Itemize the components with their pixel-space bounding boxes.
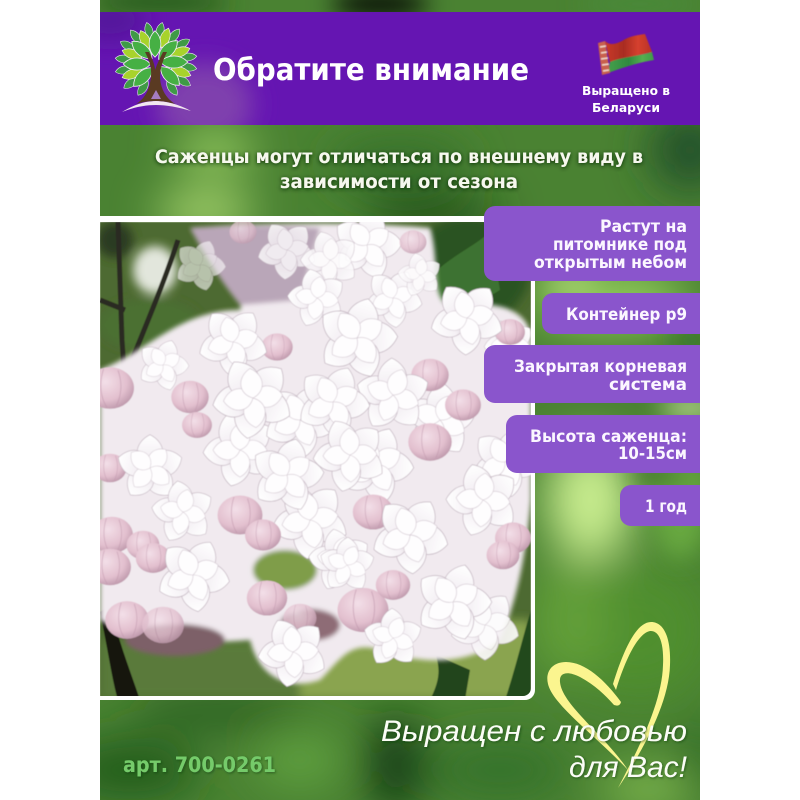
- subtitle notice: Саженцы могут отличаться по внешнему виду в: [155, 147, 643, 168]
- badge text: grown in Belarus: Беларуси: [592, 100, 660, 115]
- photo: lilac blossoms: [100, 222, 531, 696]
- tagline: [381, 715, 688, 784]
- feature tag: closed root system: [484, 345, 710, 403]
- feature tag: height: [506, 415, 710, 473]
- icon: Belarus flag: [598, 34, 654, 75]
- header band: [100, 12, 700, 125]
- feature tag: closed root system: Закрытая корневая: [514, 357, 687, 376]
- badge text: grown in Belarus: Выращено в: [582, 83, 670, 98]
- tagline: Выращен с любовью: [381, 715, 687, 748]
- buds: [86, 220, 531, 643]
- photo frame: [100, 216, 535, 700]
- subtitle notice: зависимости от сезона: [280, 172, 518, 193]
- feature tag: age: 1 год: [645, 497, 687, 516]
- heart: [547, 622, 670, 788]
- background: green bokeh: [100, 0, 700, 800]
- feature tag: age: [620, 485, 710, 526]
- feature tag: container: [542, 293, 710, 334]
- tree leaves: [115, 21, 197, 97]
- feature tag: height: 10-15см: [618, 444, 687, 463]
- feature tag: closed root system: система: [609, 375, 687, 394]
- flowers: front layer: [118, 268, 502, 688]
- subtitle notice: [155, 147, 643, 193]
- badge text: grown in Belarus: [582, 83, 670, 115]
- feature tag: height: Высота саженца:: [530, 427, 687, 446]
- tagline: для Вас!: [569, 751, 688, 784]
- logo: tree: [115, 21, 197, 112]
- title: Обратите внимание: [213, 53, 529, 88]
- feature tag: grown outdoors: [484, 206, 710, 281]
- article number: арт. 700-0261: [123, 753, 276, 777]
- feature tag: grown outdoors: открытым небом: [534, 253, 687, 272]
- feature tag: grown outdoors: Растут на: [600, 217, 687, 236]
- photo backdrop: [97, 215, 531, 700]
- blossom mass: [100, 224, 531, 684]
- feature tag: grown outdoors: питомнике под: [553, 235, 687, 254]
- feature tag: container: Контейнер р9: [566, 305, 687, 324]
- flowers: back layer: [167, 205, 550, 675]
